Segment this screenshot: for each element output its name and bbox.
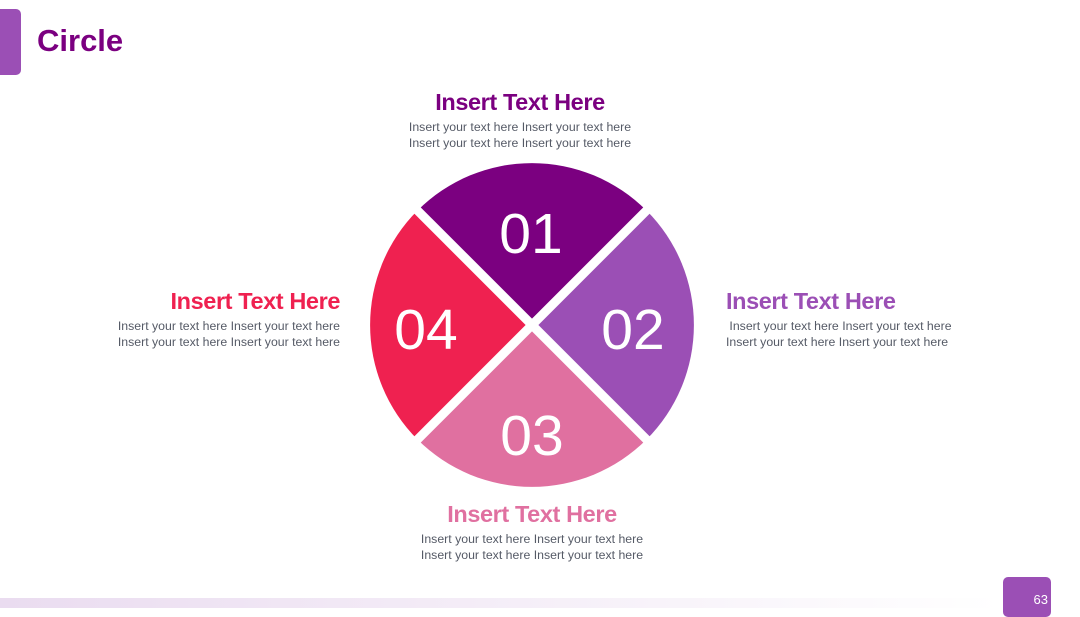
callout: right: Insert your text here Insert your text here <box>726 335 948 349</box>
callout: top: Insert your text here Insert your text here <box>409 136 631 150</box>
segment 01 <box>418 163 646 325</box>
segment 03: 03 <box>500 404 564 468</box>
callout: left: Insert Text Here <box>171 288 340 314</box>
callout: bottom: Insert Text Here <box>447 501 617 527</box>
segment 04: 04 <box>394 298 458 362</box>
page number <box>1003 577 1051 617</box>
callout: right: Insert your text here Insert your text here <box>729 319 952 333</box>
callout: top: Insert your text here Insert your text here <box>409 120 631 134</box>
title: Circle <box>37 23 123 58</box>
segment 04 <box>370 210 532 440</box>
segment 02 <box>532 210 694 440</box>
bottom gradient strip <box>0 598 1000 608</box>
callout: left: Insert your text here Insert your text here <box>118 319 340 333</box>
callout: bottom: Insert your text here Insert your text here <box>421 532 643 546</box>
callout: left: Insert your text here Insert your text here <box>118 335 340 349</box>
title tab <box>0 9 21 75</box>
callout: bottom <box>421 501 643 562</box>
callout: right <box>726 288 952 349</box>
segment 02: 02 <box>601 298 665 362</box>
page number: 63 <box>1034 592 1048 607</box>
callout: top: Insert Text Here <box>435 89 605 115</box>
segment 03 <box>418 325 646 487</box>
callout: bottom: Insert your text here Insert your text here <box>421 548 643 562</box>
callout: right: Insert Text Here <box>726 288 895 314</box>
callout: left <box>118 288 340 349</box>
segment 01: 01 <box>499 202 563 266</box>
callout: top <box>409 89 631 150</box>
